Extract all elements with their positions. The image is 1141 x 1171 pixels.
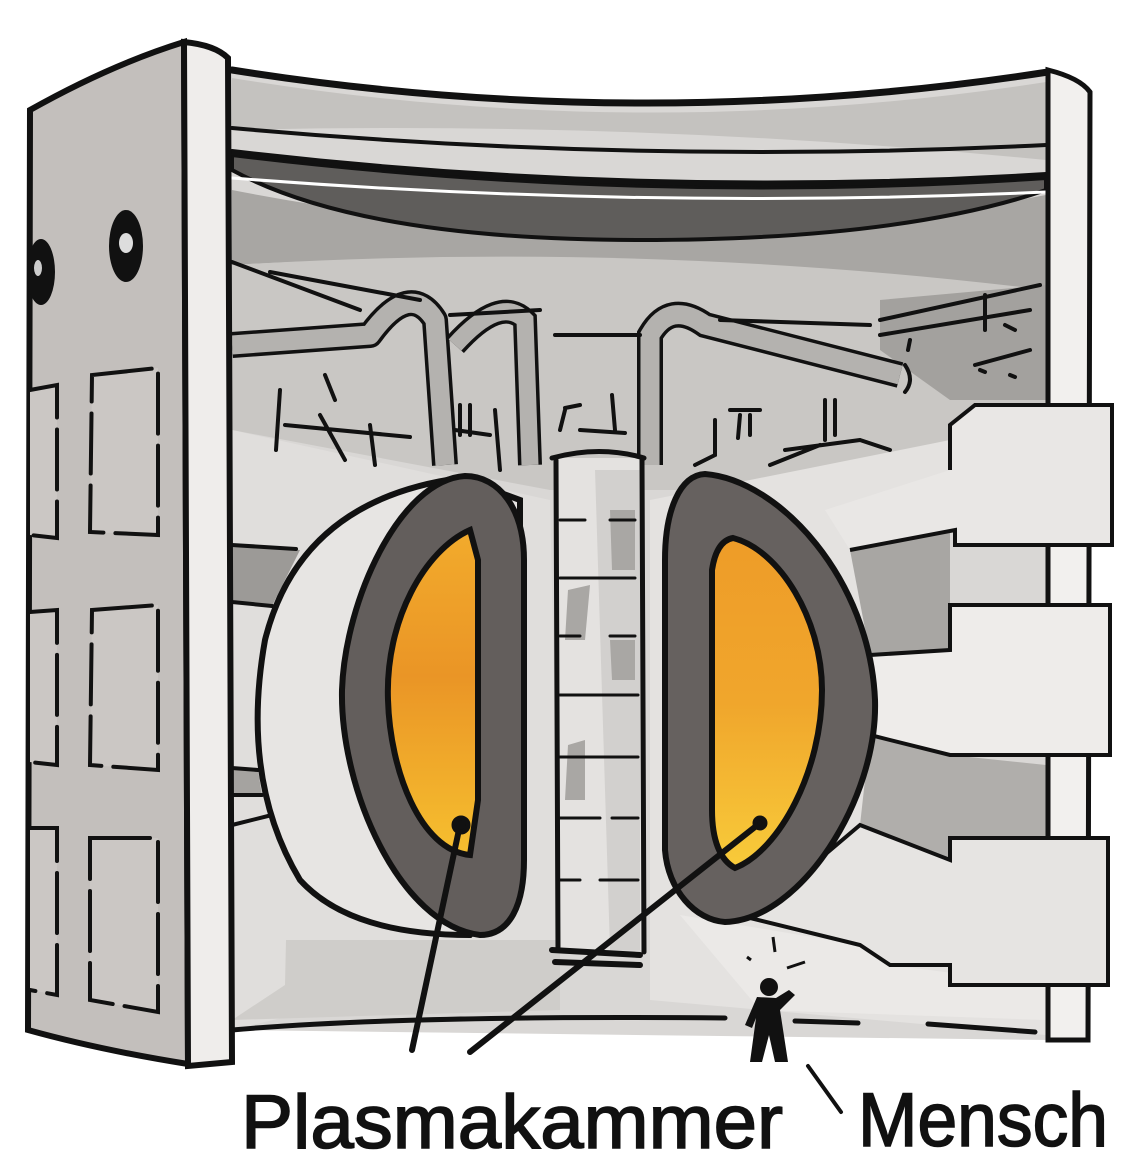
panel: right plasma vessel xyxy=(665,474,875,922)
icon: person xyxy=(745,937,805,1062)
panel: upper ring and dark arc xyxy=(232,70,1048,240)
floor line xyxy=(232,1018,1035,1032)
panel: left wall edge lines xyxy=(232,545,296,825)
vessel dark ring xyxy=(342,476,524,935)
panel: left door xyxy=(27,42,232,1066)
door panels xyxy=(30,368,158,1012)
plasma xyxy=(388,530,478,855)
panel: left plasma vessel xyxy=(258,476,524,935)
panel: central column xyxy=(552,452,644,965)
panel: pipes and wall details xyxy=(232,262,1040,470)
pointer lines xyxy=(412,818,841,1112)
label: Plasmakammer: Plasmakammer xyxy=(241,1080,783,1165)
door face xyxy=(28,42,188,1064)
panel: right port extensions xyxy=(750,405,1112,985)
door edge xyxy=(184,42,232,1066)
vessel dark ring xyxy=(665,474,875,922)
door holes xyxy=(109,210,143,282)
panel: back wall xyxy=(230,70,1048,1040)
panel: right support column xyxy=(1048,70,1090,1040)
vessel outer shell xyxy=(258,478,520,935)
label: Mensch: Mensch xyxy=(858,1078,1108,1163)
plasma xyxy=(712,538,822,868)
